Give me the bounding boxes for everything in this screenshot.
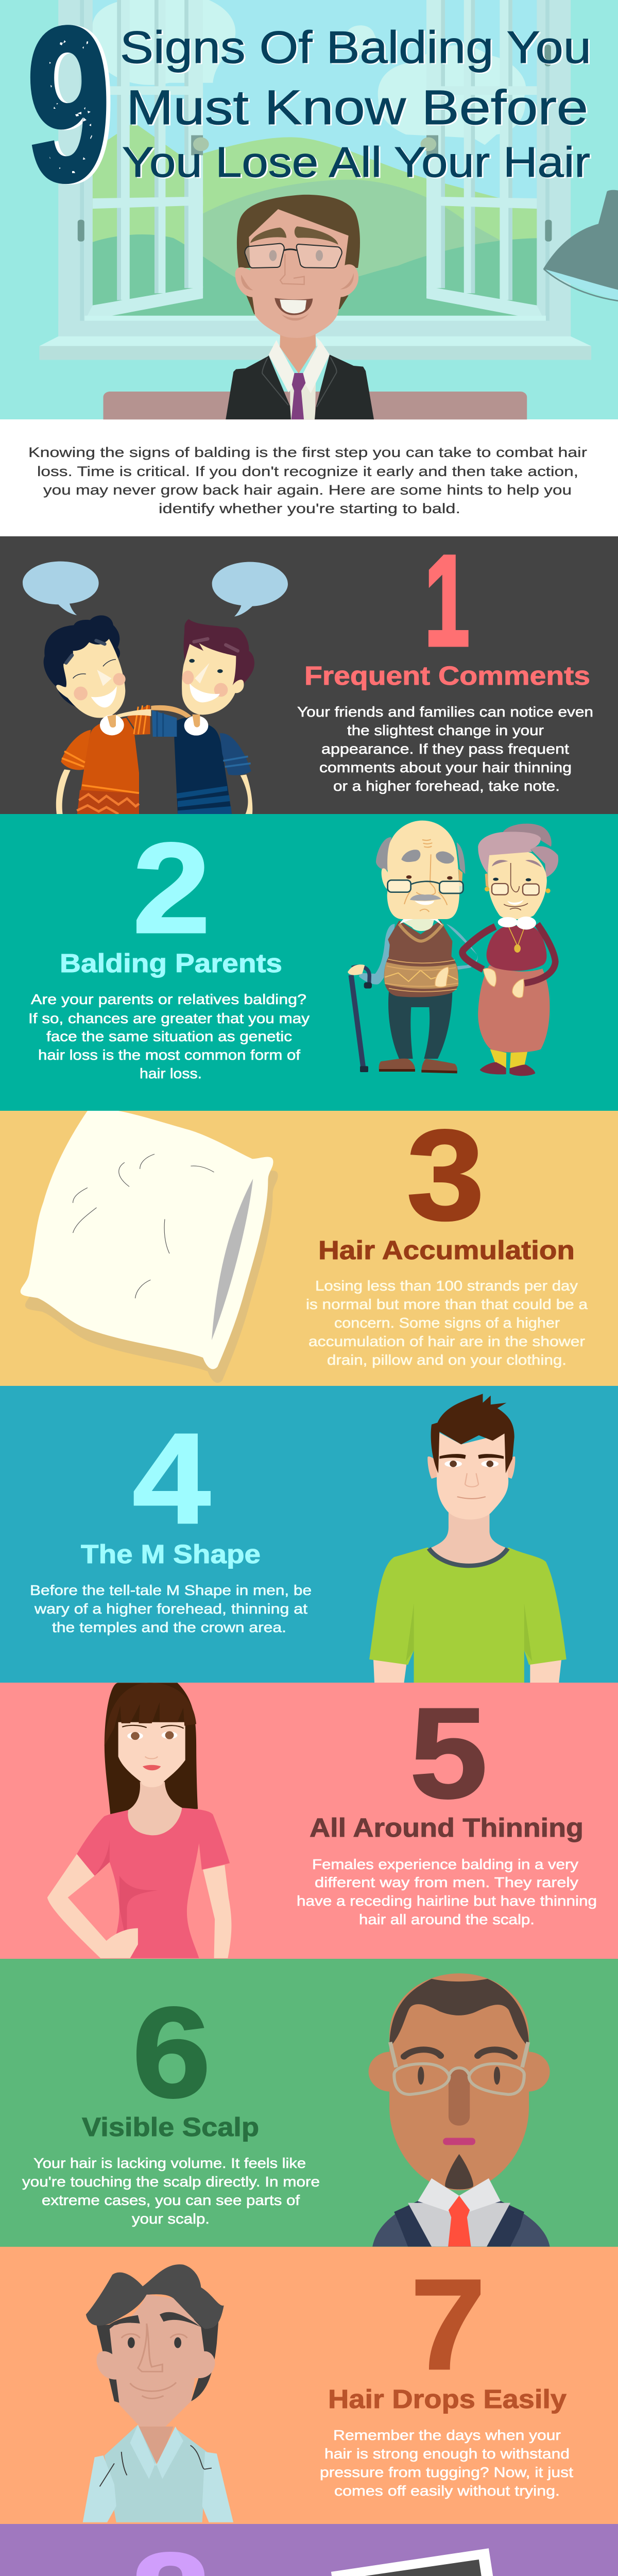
panel: 3 hair accumulation [0, 1103, 618, 1386]
heading: hair drops easily: Hair Drops Easily [328, 2384, 567, 2414]
text block: section 2 body: If so, chances are greater that you may [28, 1010, 310, 1026]
heading: the M shape: The M Shape [81, 1539, 261, 1569]
text block: section 1 body: comments about your hair thinning [319, 759, 572, 775]
number 6: 6 [132, 1980, 211, 2124]
panel: 4 the M shape [0, 1386, 618, 1683]
text block: intro paragraph [28, 445, 587, 516]
heading: hair accumulation: Hair Accumulation [318, 1235, 575, 1265]
text block: section 4 body: the temples and the crown area. [52, 1619, 286, 1635]
text block: section 2 body: hair loss. [140, 1065, 202, 1081]
text block: section 5 body: hair all around the scalp. [359, 1911, 535, 1927]
text block: intro paragraph: you may never grow back hair again. Here are some hints to help you [43, 482, 572, 498]
icon: two polaroid photos [331, 2548, 618, 2576]
number 3: 3 [406, 1103, 485, 1247]
panel: 5 all around thinning [0, 1681, 618, 1959]
icon: young man in green t-shirt [369, 1394, 566, 1683]
text block: section 3 body: is normal but more than that could be a [306, 1296, 588, 1312]
title: 9 signs of balding: You Lose All Your Hair [124, 139, 592, 187]
number 1: 1 [424, 529, 470, 673]
text block: section 6 body: your scalp. [132, 2211, 210, 2227]
text block: section 6 body [22, 2155, 320, 2227]
text block: section 2 body: face the same situation as genetic [46, 1028, 292, 1044]
number 2: 2 [132, 816, 211, 960]
panel: 2 balding parents [0, 814, 618, 1111]
title: 9 signs of balding: Must Know Before [126, 80, 588, 135]
text block: section 7 body: comes off easily without trying. [334, 2483, 560, 2499]
text block: section 7 body: pressure from tugging? Now, it just [320, 2464, 573, 2480]
text block: section 6 body: you're touching the scalp directly. In more [22, 2174, 320, 2190]
text block: section 6 body: extreme cases, you can see parts of [42, 2192, 300, 2208]
title: 9 signs of balding: Must Know Before [128, 81, 590, 136]
icon: elderly couple [348, 821, 558, 1076]
heading: all around thinning: All Around Thinning [310, 1813, 583, 1842]
text block: section 3 body: drain, pillow and on your clothing. [327, 1352, 566, 1368]
icon: two friends with speech bubbles [23, 562, 288, 814]
text block: section 1 body: appearance. If they pass frequent [321, 741, 569, 757]
icon: pillow with fallen hairs [21, 1111, 278, 1383]
icon: woman with long hair [47, 1683, 231, 1958]
text block: section 4 body [30, 1582, 312, 1635]
text block: section 7 body [320, 2427, 573, 2499]
text block: intro paragraph: identify whether you're starting to bald. [159, 501, 460, 516]
text block: section 3 body [306, 1278, 588, 1368]
text block: section 6 body: Your hair is lacking volume. It feels like [33, 2155, 306, 2171]
text block: section 5 body: Females experience balding in a very [312, 1856, 578, 1872]
icon: balding man in suit [369, 1973, 550, 2247]
panel: 8 old pictures [0, 2524, 618, 2576]
text block: section 2 body: hair loss is the most common form of [38, 1047, 300, 1063]
text block: intro paragraph: loss. Time is critical. If you don't recognize it early and then take action, [37, 464, 578, 479]
text block: section 7 body: hair is strong enough to withstand [324, 2446, 570, 2462]
text block: section 5 body [297, 1856, 597, 1927]
text block: section 4 body: Before the tell-tale M Shape in men, be [30, 1582, 312, 1598]
text block: section 1 body [297, 704, 593, 794]
panel: hero header illustration [0, 0, 618, 419]
number 5: 5 [409, 1681, 488, 1825]
title: 9 signs of balding: Signs Of Balding You [120, 22, 591, 73]
panel: 6 visible scalp [0, 1959, 618, 2247]
text block: section 1 body: the slightest change in your [347, 722, 544, 738]
left sash [78, 0, 209, 321]
heading: visible scalp: Visible Scalp [82, 2112, 259, 2142]
title: 9 signs of balding: Signs Of Balding You [122, 23, 593, 74]
panel: 7 hair drops easily [0, 2247, 618, 2524]
number 4: 4 [132, 1406, 212, 1551]
panel: 1 frequent comments [0, 529, 618, 815]
text block: intro paragraph: Knowing the signs of balding is the first step you can take to combat hair [28, 445, 587, 460]
text block: section 5 body: different way from men. They rarely [315, 1874, 578, 1890]
heading: balding parents: Balding Parents [60, 948, 282, 978]
text block: section 2 body: Are your parents or relatives balding? [31, 991, 306, 1007]
text block: section 2 body [28, 991, 310, 1081]
text block: section 3 body: Losing less than 100 strands per day [315, 1278, 578, 1294]
text block: section 7 body: Remember the days when your [333, 2427, 561, 2443]
window scene [40, 0, 591, 419]
icon: wall lamp [543, 190, 618, 301]
text block: section 1 body: Your friends and families can notice even [297, 704, 593, 720]
title: 9 signs of balding: You Lose All Your Hair [122, 138, 590, 186]
number 7: 7 [410, 2253, 486, 2397]
icon: man with dark quiff [83, 2264, 233, 2522]
text block: section 5 body: have a receding hairline but have thinning [297, 1893, 597, 1909]
icon: man with glasses [226, 195, 374, 419]
text block: section 1 body: or a higher forehead, take note. [333, 778, 560, 794]
text block: section 4 body: wary of a higher forehead, thinning at [34, 1601, 307, 1617]
text block: section 3 body: concern. Some signs of a higher [334, 1315, 560, 1331]
text block: section 3 body: accumulation of hair are in the shower [308, 1333, 585, 1349]
title: 9 signs of balding [26, 0, 593, 227]
heading: frequent comments: Frequent Comments [304, 661, 590, 690]
